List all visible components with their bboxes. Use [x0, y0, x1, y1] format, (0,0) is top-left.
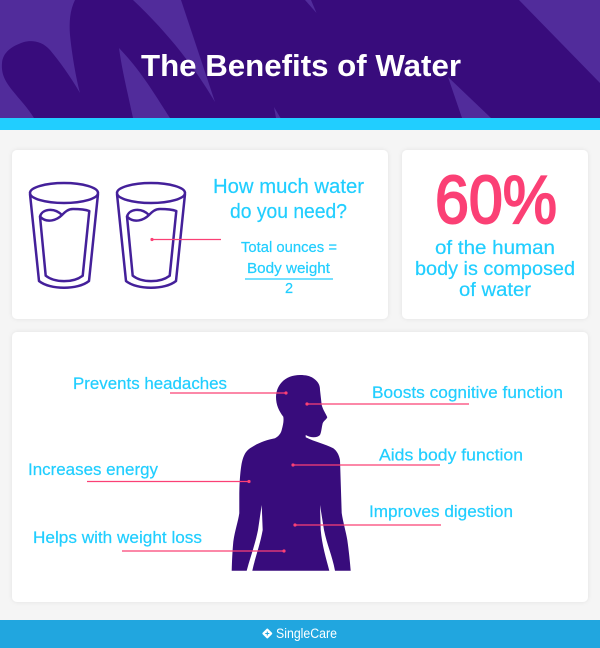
big number: 60% — [435, 162, 557, 238]
title: The Benefits of Water — [141, 48, 461, 83]
label: aids body function: Aids body function — [379, 446, 523, 464]
header banner — [0, 0, 600, 118]
logo icon — [262, 628, 273, 639]
caption: of the human — [435, 238, 555, 259]
label: increases energy: Increases energy — [28, 461, 159, 479]
question heading: How much water — [213, 176, 364, 198]
label: prevents headaches: Prevents headaches — [73, 375, 227, 393]
formula — [241, 240, 337, 297]
cyan band — [0, 118, 600, 130]
question heading: do you need? — [230, 201, 347, 223]
panel: 60 percent — [402, 150, 588, 319]
formula: Total ounces = — [241, 240, 337, 256]
label: helps with weight loss: Helps with weight loss — [33, 529, 202, 547]
panel: how much water — [12, 150, 388, 319]
label: boosts cognitive function — [305, 384, 563, 406]
question heading — [213, 176, 364, 223]
body silhouette — [232, 375, 351, 571]
label: boosts cognitive function: Boosts cognitive function — [372, 384, 563, 402]
label: improves digestion — [293, 503, 513, 527]
caption: body is composed — [415, 259, 575, 280]
panel: body benefits — [12, 332, 588, 602]
label: helps with weight loss — [33, 529, 286, 553]
formula: Body weight — [247, 261, 330, 277]
formula: 2 — [285, 281, 293, 297]
label: improves digestion: Improves digestion — [369, 503, 513, 521]
logo text: SingleCare — [276, 626, 337, 641]
caption — [415, 238, 575, 301]
footer — [0, 620, 600, 648]
label: aids body function — [291, 446, 523, 467]
label: prevents headaches — [73, 375, 288, 395]
caption: of water — [459, 280, 532, 301]
pointer line — [150, 238, 221, 241]
icon: left glass — [30, 183, 98, 288]
label: increases energy — [28, 461, 251, 483]
icon: right glass — [117, 183, 185, 288]
